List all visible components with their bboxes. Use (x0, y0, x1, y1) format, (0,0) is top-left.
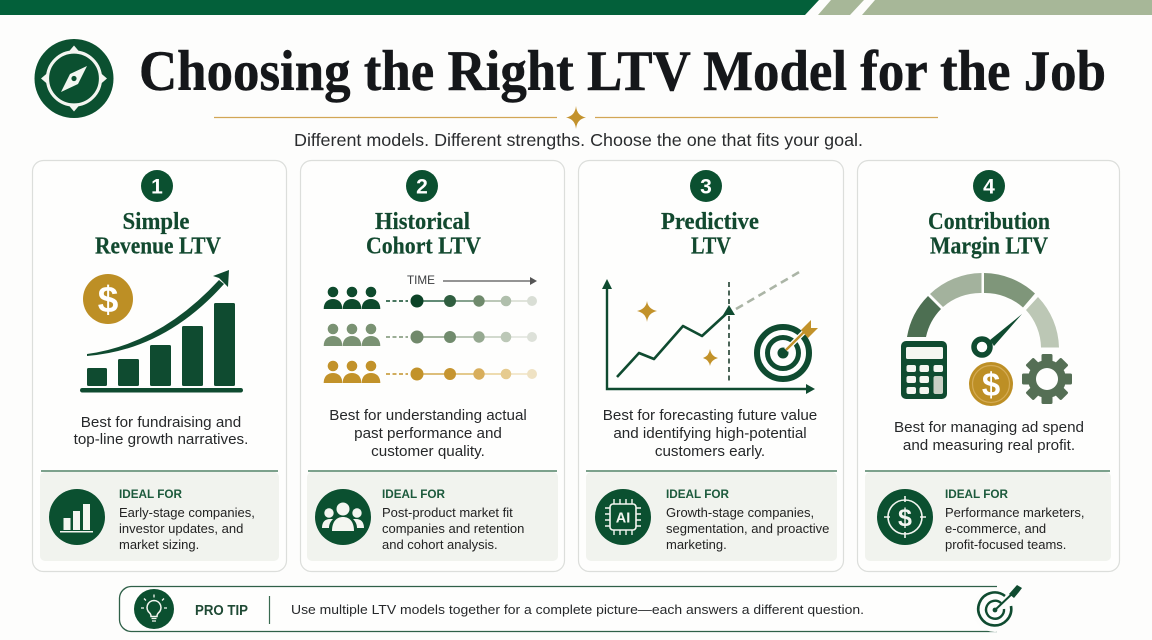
chart: cohorts over time: TIME (407, 273, 435, 287)
ideal for box: e-commerce, and (945, 521, 1046, 536)
ideal for box (586, 472, 837, 561)
ideal for box (307, 472, 558, 561)
icon: dollar target (877, 489, 933, 545)
ideal for box: investor updates, and (119, 521, 243, 536)
description: Best for fundraising and (81, 414, 241, 431)
ideal for box: Early-stage companies, (119, 505, 255, 520)
description: customers early. (655, 443, 765, 460)
ideal for box: marketing. (666, 537, 727, 552)
number badge 3 (690, 170, 722, 202)
ideal for box: Post-product market fit (382, 505, 513, 520)
number badge 4: 4 (983, 176, 995, 198)
panel: Predictive LTV (578, 160, 844, 572)
title ornament rule (214, 106, 938, 129)
description: and measuring real profit. (903, 437, 1075, 454)
panel: Historical Cohort LTV (300, 160, 564, 572)
ideal for box: IDEAL FOR (666, 487, 729, 501)
icon: dollar target: $ (898, 504, 912, 532)
icon: AI chip (595, 489, 651, 545)
number badge 2 (406, 170, 438, 202)
description (74, 414, 248, 448)
ideal for box: market sizing. (119, 537, 199, 552)
number badge 1 (141, 170, 173, 202)
ideal for box: IDEAL FOR (945, 487, 1008, 501)
icon: dart target (973, 585, 1022, 632)
description: Best for managing ad spend (894, 419, 1084, 436)
number badge 4 (973, 170, 1005, 202)
title: Choosing the Right LTV Model for the Job (139, 40, 1106, 103)
chart: margin gauge with calculator, coin and gear: $ (982, 366, 1000, 403)
number badge 1: 1 (151, 176, 163, 198)
icon: compass (34, 39, 114, 118)
chart: forecast line with target (602, 271, 818, 394)
ideal for box: companies and retention (382, 521, 524, 536)
icon: bars (49, 489, 105, 545)
description: top-line growth narratives. (74, 431, 248, 448)
ideal for box: segmentation, and proactive (666, 521, 829, 536)
callout: pro tip (120, 585, 1022, 632)
callout: pro tip: Use multiple LTV models together for a complete picture—each answers a different question. (291, 602, 864, 617)
ideal for box: profit-focused teams. (945, 537, 1066, 552)
description: Best for understanding actual (329, 407, 527, 424)
heading: LTV (691, 234, 732, 260)
top banner (0, 0, 1152, 15)
number badge 2: 2 (416, 176, 428, 198)
heading: Predictive (661, 209, 759, 235)
number badge 3: 3 (700, 176, 712, 198)
heading: Revenue LTV (95, 234, 222, 260)
heading (95, 209, 222, 260)
description (329, 407, 527, 460)
ideal for box (40, 472, 279, 561)
ideal for box: IDEAL FOR (382, 487, 445, 501)
panel: Contribution Margin LTV (858, 160, 1120, 572)
ideal for box: IDEAL FOR (119, 487, 182, 501)
subtitle: Different models. Different strengths. Choose the one that fits your goal. (294, 130, 863, 150)
ideal for box: Performance marketers, (945, 505, 1084, 520)
chart: rising bars with arrow and coin: $ (98, 279, 119, 320)
description (894, 419, 1084, 454)
chart: rising bars with arrow and coin (80, 270, 243, 392)
chart: cohorts over time (324, 273, 537, 383)
description: Best for forecasting future value (603, 407, 817, 424)
description (603, 407, 817, 460)
panel: Simple Revenue LTV (32, 160, 286, 572)
heading (661, 209, 759, 260)
ideal for box (865, 472, 1111, 561)
ideal for box: Growth-stage companies, (666, 505, 814, 520)
heading: Margin LTV (930, 234, 1049, 260)
description: customer quality. (371, 443, 485, 460)
description: past performance and (354, 425, 502, 442)
heading: Contribution (928, 209, 1050, 235)
heading (366, 209, 482, 260)
chart: margin gauge with calculator, coin and gear (901, 273, 1072, 406)
heading: Historical (375, 209, 470, 235)
callout: pro tip: PRO TIP (195, 603, 248, 619)
icon: AI chip: AI (616, 510, 630, 526)
icon: light bulb (134, 589, 174, 629)
ideal for box: and cohort analysis. (382, 537, 498, 552)
description: and identifying high-potential (613, 425, 807, 442)
icon: team (315, 489, 371, 545)
heading: Simple (122, 209, 190, 235)
heading: Cohort LTV (366, 234, 482, 260)
heading (928, 209, 1050, 260)
